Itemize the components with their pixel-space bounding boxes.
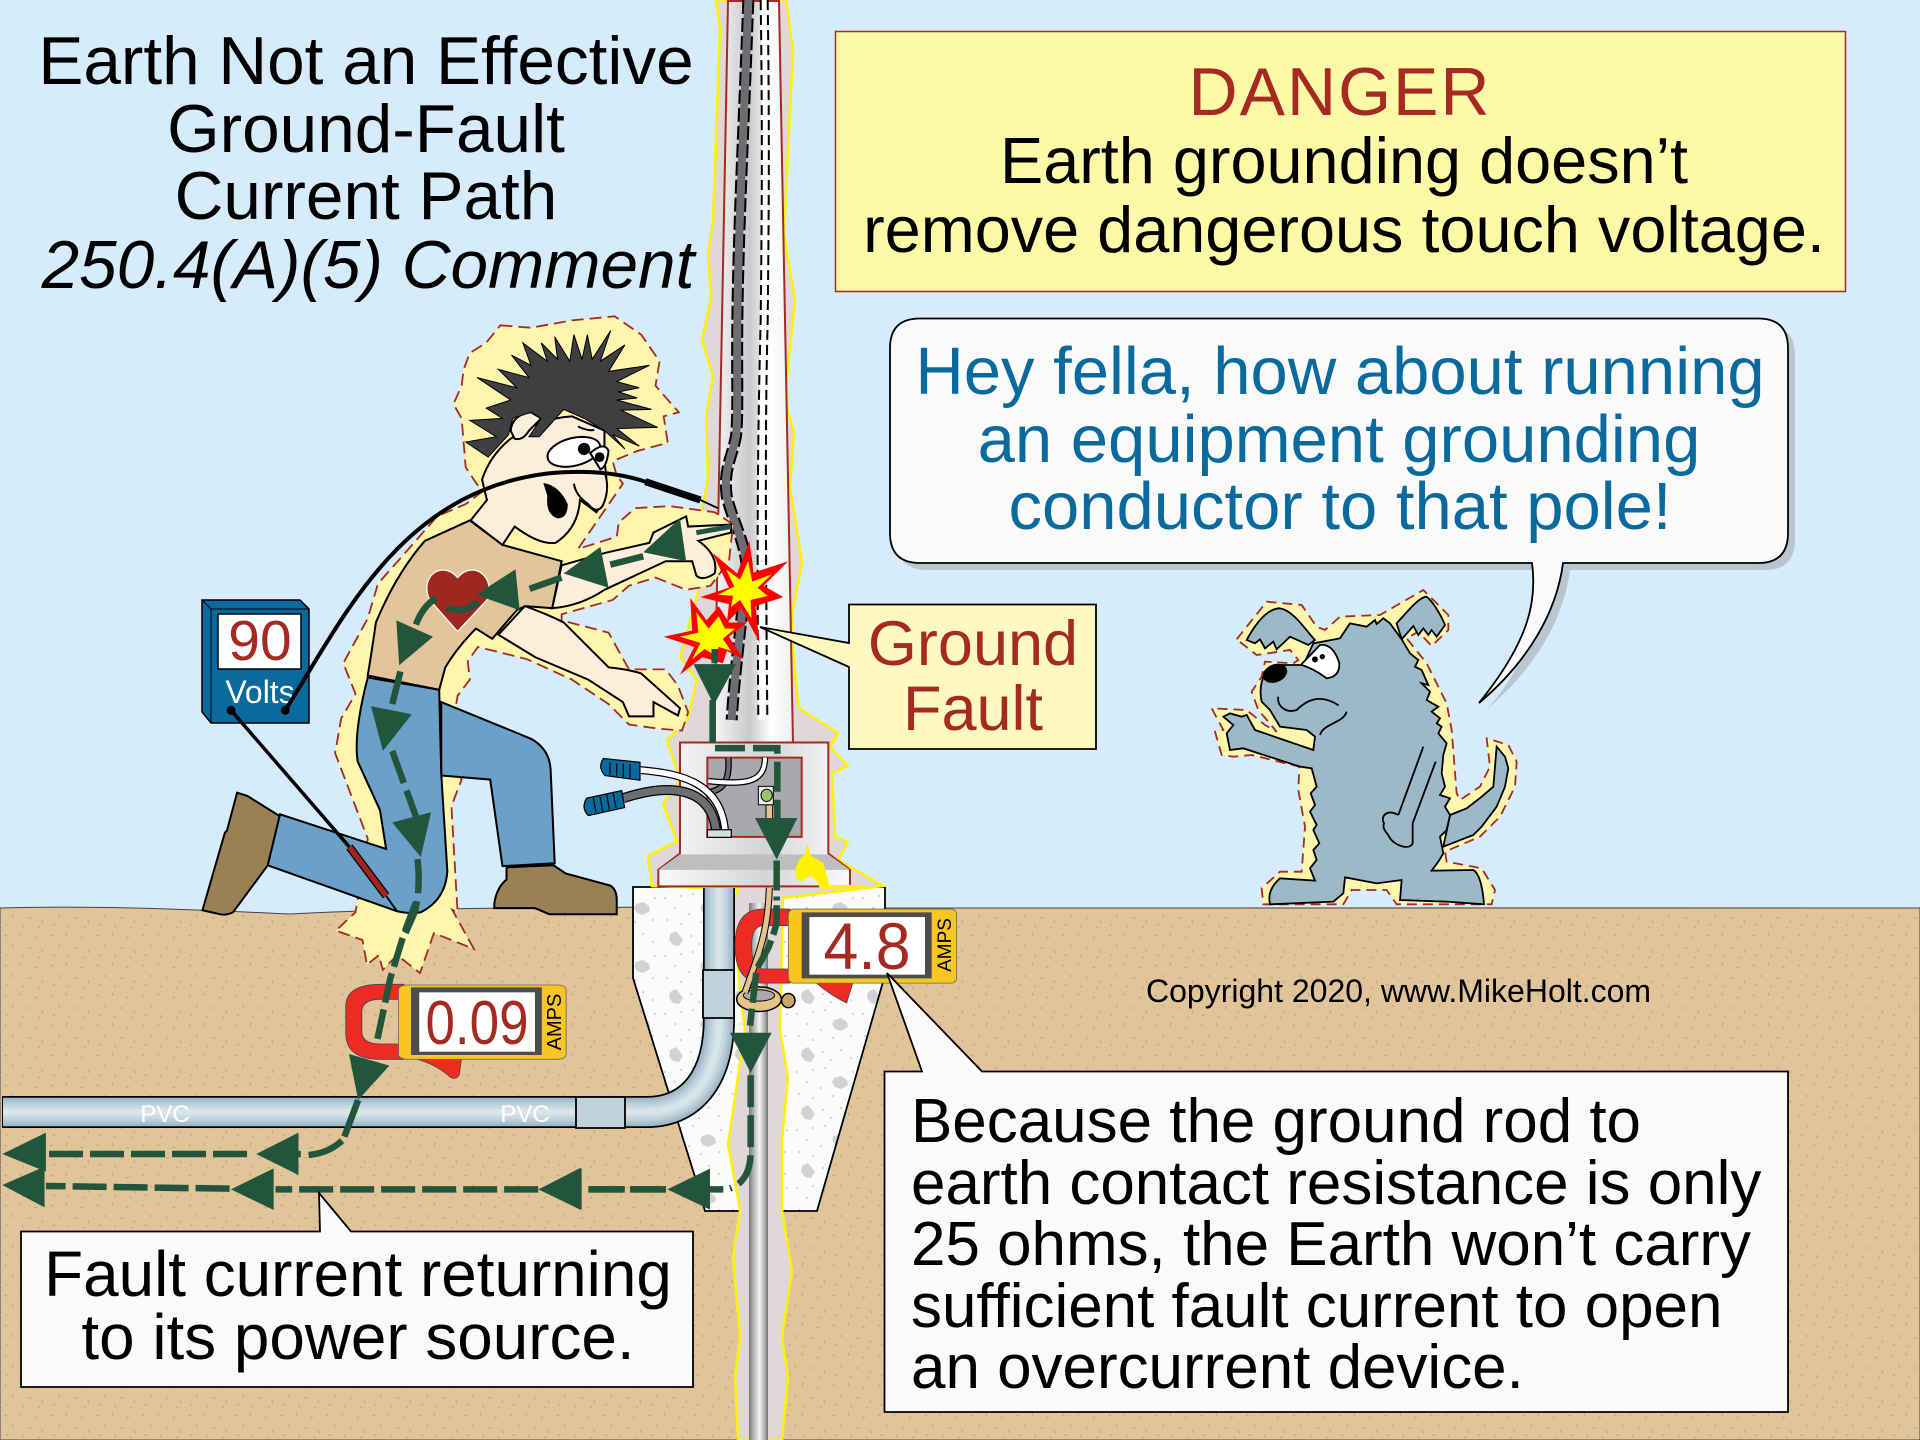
rod clamp <box>737 987 795 1011</box>
callout: earth contact resistance: earth contact resistance is only <box>911 1149 1761 1218</box>
wire connector <box>707 830 731 837</box>
title: 250.4(A)(5) Comment <box>41 228 698 303</box>
speech bubble <box>890 318 1795 710</box>
fault sparks <box>664 541 788 675</box>
dog right ear <box>1397 597 1445 639</box>
ground fault callout <box>760 604 1096 749</box>
ground fault callout: Fault <box>903 674 1044 744</box>
callout: earth contact resistance: sufficient fault current to open <box>911 1272 1722 1341</box>
amps label right meter: AMPS <box>935 918 956 972</box>
green current path on man <box>392 527 731 940</box>
callout: fault current returning: to its power source. <box>81 1301 635 1373</box>
clamp meter 0.09 <box>346 984 566 1078</box>
dog eye <box>1302 645 1339 678</box>
junction box <box>584 742 865 889</box>
voltmeter: Volts <box>225 674 295 710</box>
pvc conduit <box>2 888 734 1128</box>
utility pole <box>714 0 793 744</box>
mouth <box>543 483 568 518</box>
amps label left meter: AMPS <box>544 994 566 1050</box>
title: Earth Not an Effective <box>38 24 694 99</box>
current arrows on man <box>371 518 686 857</box>
pvc labels: PVC <box>500 1101 550 1128</box>
head and neck <box>471 416 606 545</box>
meter test leads <box>227 472 718 910</box>
callout: earth contact resistance: an overcurrent device. <box>911 1333 1524 1402</box>
current path through pole and rod <box>588 700 777 1189</box>
speech bubble: an equipment grounding <box>978 402 1700 477</box>
spiky hair <box>466 331 658 457</box>
dog nose <box>1260 660 1290 686</box>
ground fault callout: Ground <box>868 609 1078 679</box>
danger panel: remove dangerous touch voltage. <box>863 193 1825 266</box>
speech bubble: conductor to that pole! <box>1008 469 1672 544</box>
voltmeter <box>202 600 309 723</box>
arrow below sparks <box>693 649 736 743</box>
callout: fault current returning <box>21 1193 693 1387</box>
front boot <box>494 865 617 914</box>
reading 0.09: 0.09 <box>426 989 528 1058</box>
man aura <box>335 316 733 973</box>
nose <box>574 471 607 510</box>
rear boot <box>202 793 280 915</box>
speech bubble: Hey fella, how about running <box>915 334 1765 409</box>
brow <box>578 427 594 430</box>
jeans back leg <box>441 702 555 866</box>
callout: earth contact resistance: Because the ground rod to <box>911 1087 1641 1156</box>
ground texture <box>0 909 1920 1440</box>
upper spark <box>700 541 788 643</box>
ground screw <box>766 805 773 819</box>
concrete footing <box>633 887 885 1211</box>
clamp meter 4.8 <box>735 888 957 1003</box>
voltmeter: 90 <box>228 609 292 673</box>
yellow electric blob <box>795 843 865 889</box>
meter body <box>399 985 566 1059</box>
eyes <box>544 432 603 472</box>
red jaw <box>735 909 790 983</box>
title: Ground-Fault <box>167 92 565 167</box>
inner wires <box>623 758 765 830</box>
grounding conductor <box>745 888 769 993</box>
dog aura <box>1212 590 1517 904</box>
callout: fault current returning: Fault current returning <box>44 1238 672 1310</box>
current path to left meter and earth return <box>2 903 666 1210</box>
shirt <box>368 520 562 690</box>
wire nuts <box>601 759 640 780</box>
conduit couplings <box>703 970 734 1018</box>
ear <box>511 412 541 439</box>
title: Current Path <box>175 159 557 234</box>
meter body <box>788 909 957 983</box>
dog mouth and arm lines <box>1278 697 1436 847</box>
pvc labels: PVC <box>140 1101 190 1128</box>
danger panel: DANGER <box>1189 54 1491 130</box>
callout: earth contact resistance <box>884 973 1788 1412</box>
pointing arm <box>498 606 680 716</box>
pvc labels <box>140 1101 550 1128</box>
ground rod <box>737 903 795 1440</box>
heart <box>427 570 489 631</box>
callout: earth contact resistance: 25 ohms, the Earth won’t carry <box>911 1210 1751 1279</box>
jeans front leg <box>268 678 447 913</box>
copyright: Copyright 2020, www.MikeHolt.com <box>1146 973 1651 1009</box>
danger panel <box>836 32 1846 292</box>
title <box>38 24 698 303</box>
electrified aura around pole and rod <box>648 0 883 1440</box>
dog left ear <box>1247 608 1315 649</box>
dog body <box>1223 618 1484 904</box>
danger panel: Earth grounding doesn’t <box>1000 124 1688 197</box>
red jaw <box>346 984 404 1059</box>
ground <box>0 907 1920 1440</box>
lower spark <box>664 598 747 675</box>
reading 4.8: 4.8 <box>824 909 910 983</box>
man with electric aura <box>202 316 733 973</box>
dog <box>1212 590 1517 904</box>
grey conductor in pole <box>726 0 769 720</box>
sky background <box>0 0 1920 920</box>
dog tail <box>1443 747 1508 847</box>
current arrows on pole and rod <box>538 818 797 1210</box>
reaching arm <box>552 516 731 608</box>
